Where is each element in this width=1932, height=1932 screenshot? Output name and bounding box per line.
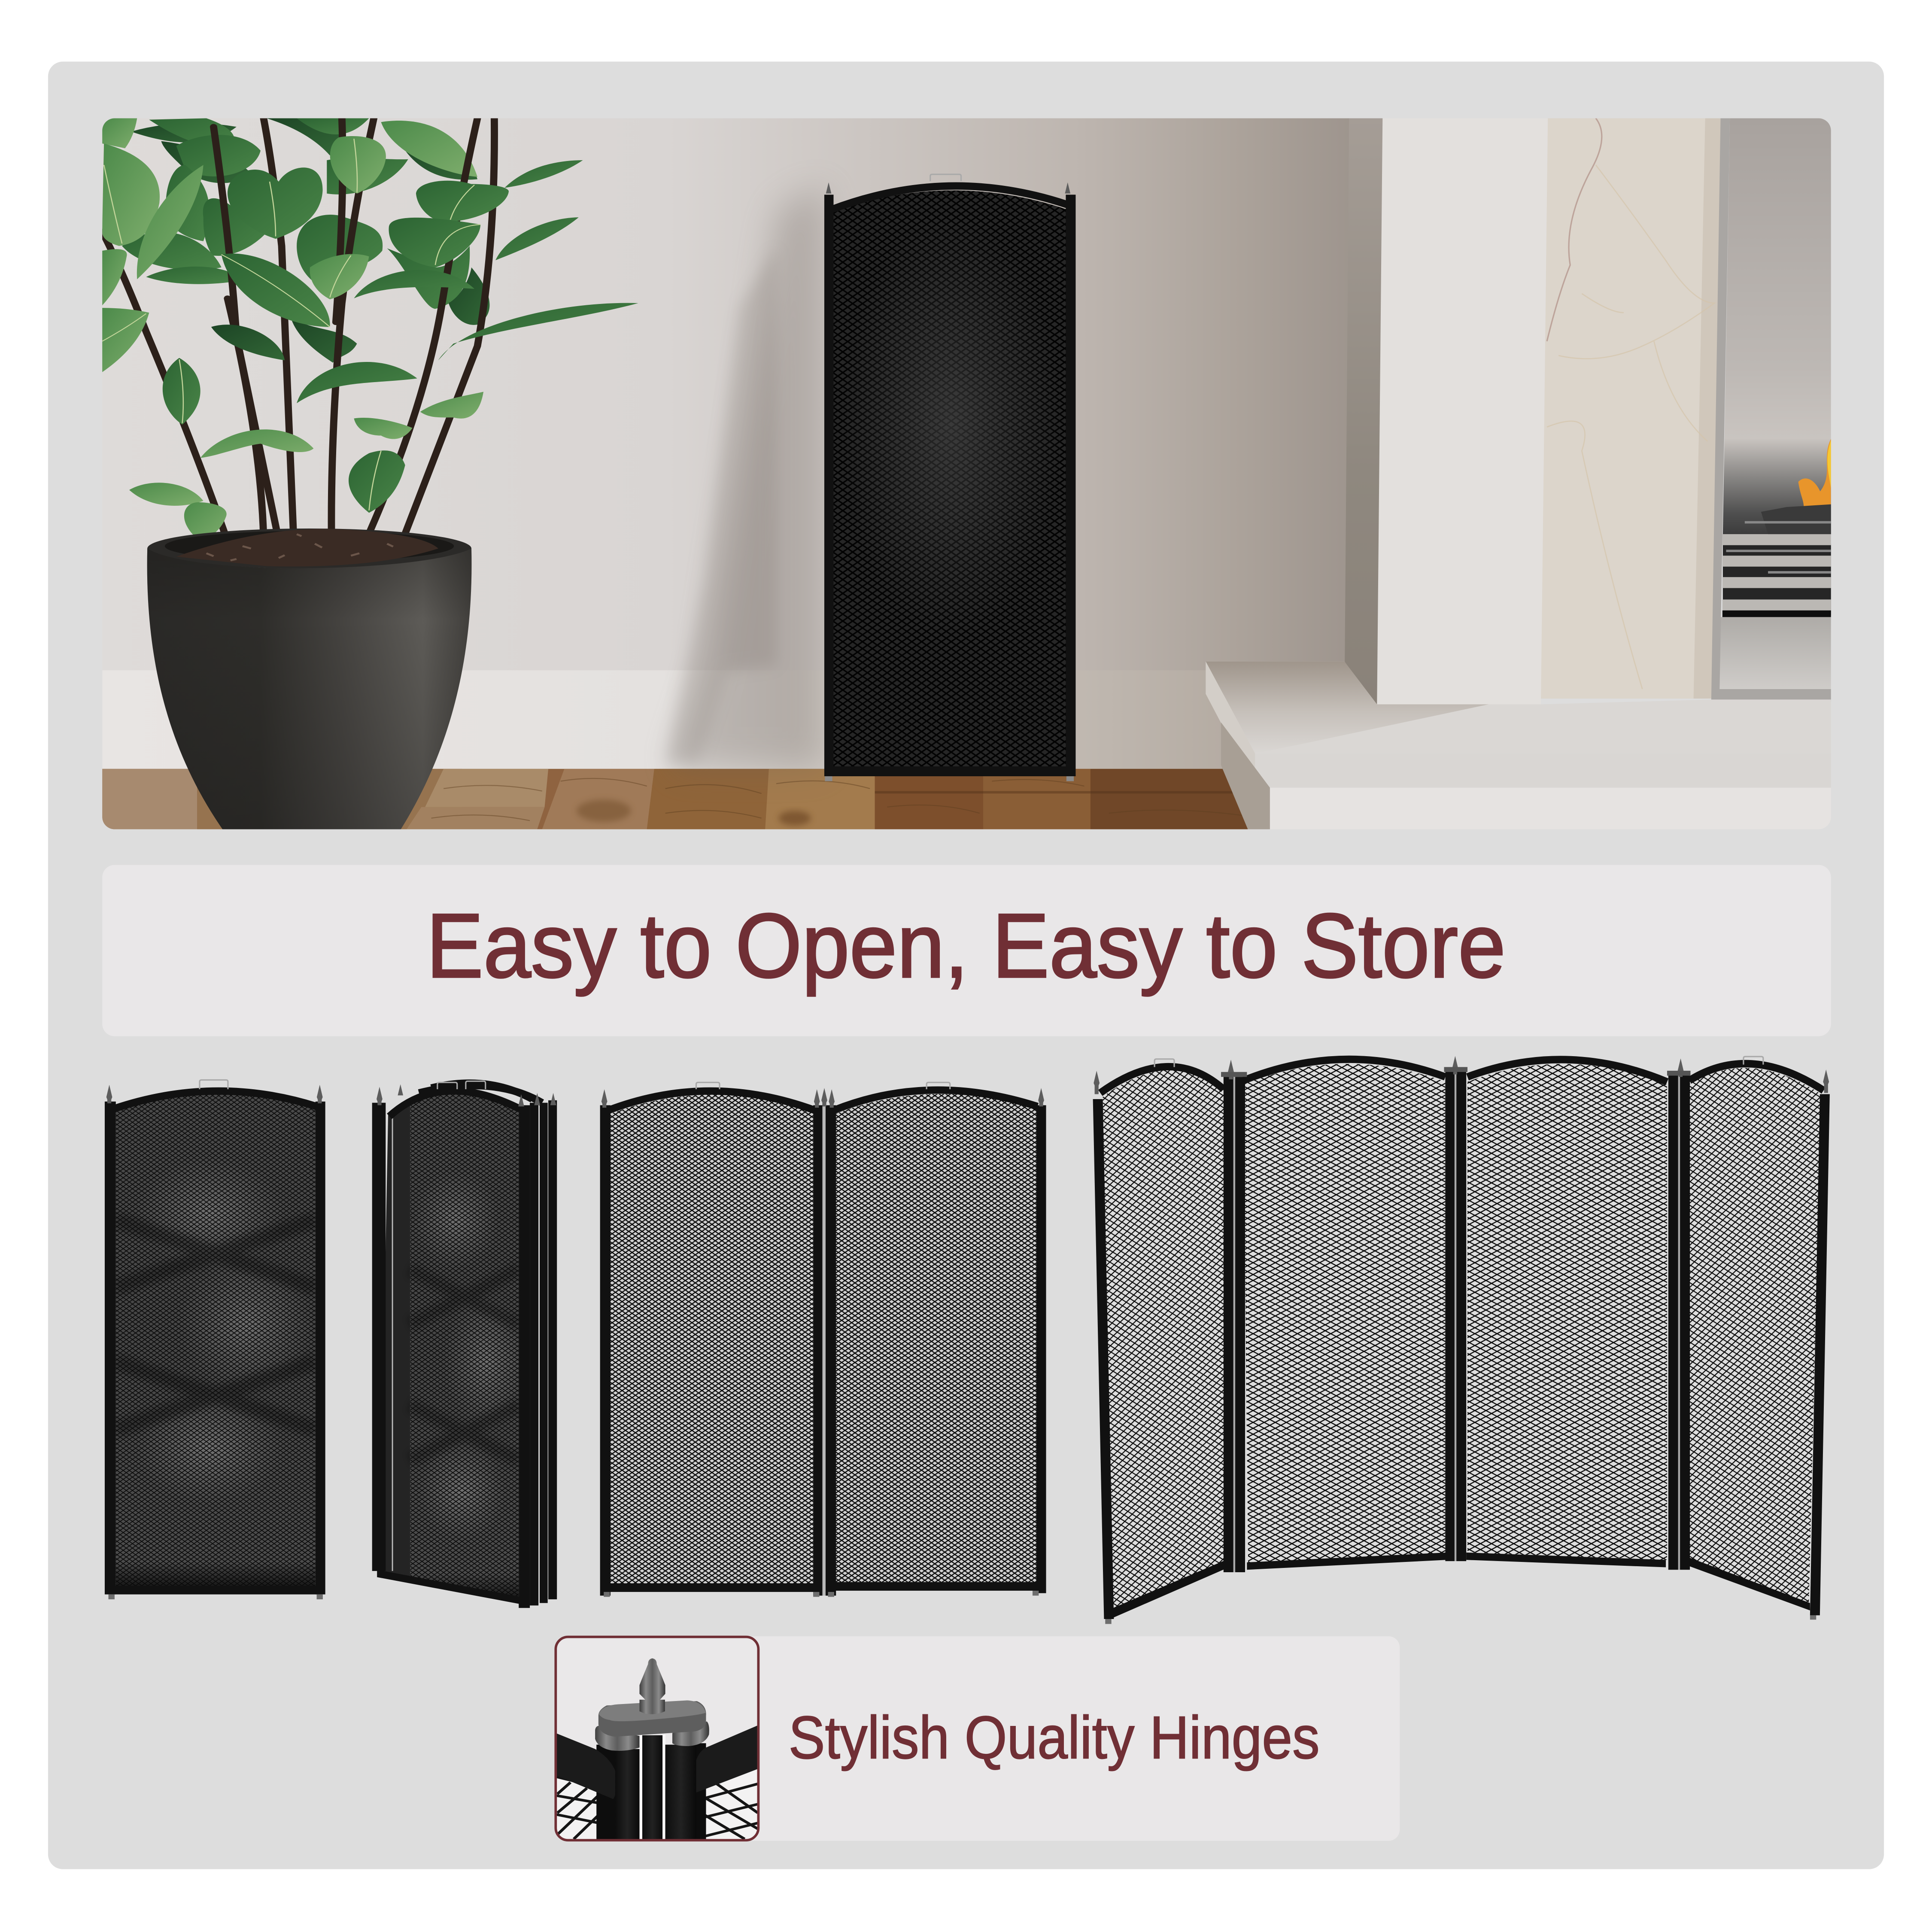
frame xyxy=(372,1081,556,1608)
wooden floor xyxy=(102,769,1261,829)
mesh left wires xyxy=(556,1777,613,1839)
mesh xyxy=(833,190,1067,768)
pillar side return xyxy=(1344,118,1384,704)
grate bars xyxy=(1722,534,1834,611)
moire glow xyxy=(116,1090,316,1587)
hearth base side xyxy=(1221,723,1270,832)
left tube xyxy=(615,1749,639,1841)
hearth side edge xyxy=(1206,662,1255,788)
coals xyxy=(1761,504,1833,534)
wall shadow of screen xyxy=(671,185,824,769)
right arm xyxy=(694,1725,759,1792)
pot rim xyxy=(147,529,471,568)
mesh right xyxy=(705,1768,758,1841)
finial xyxy=(639,1658,665,1714)
folded screen in room xyxy=(824,174,1075,781)
cap front xyxy=(598,1701,706,1737)
frame xyxy=(600,1082,1046,1597)
lifestyle photo: folded screen beside plant and fireplace xyxy=(102,118,1835,832)
hinge close-up thumbnail xyxy=(556,1636,759,1841)
title text: Easy to Open, Easy to Store xyxy=(426,895,1506,997)
panel 3 mesh xyxy=(1467,1064,1667,1560)
back rods xyxy=(419,1083,557,1605)
soil xyxy=(176,529,438,566)
title band xyxy=(102,865,1831,1036)
thumbnail border xyxy=(556,1637,758,1840)
right mesh xyxy=(835,1094,1037,1583)
back tubes xyxy=(596,1745,616,1841)
frame xyxy=(105,1080,325,1599)
hearth base front xyxy=(1270,788,1833,832)
left collar xyxy=(595,1726,639,1751)
fireplace xyxy=(1206,118,1835,832)
frames and hinges xyxy=(1093,1056,1830,1624)
flame xyxy=(1798,439,1832,513)
panel 4 mesh xyxy=(1684,1068,1821,1605)
centre tube xyxy=(642,1735,662,1841)
panel 2 mesh xyxy=(1243,1064,1445,1564)
back leaves xyxy=(122,118,489,363)
screen stage 1: fully folded xyxy=(105,1080,325,1599)
right tube xyxy=(665,1745,696,1841)
hearth front edge xyxy=(1255,753,1833,788)
pot shading xyxy=(147,549,471,832)
white gaps xyxy=(639,1735,665,1841)
mesh highlight xyxy=(840,216,1062,635)
screen stage 4: fully open four panels xyxy=(1093,1056,1830,1624)
hearth top xyxy=(1206,662,1833,753)
wall xyxy=(481,118,1349,671)
panel 1 mesh xyxy=(1103,1070,1228,1613)
mesh xyxy=(116,1090,316,1587)
mesh left xyxy=(556,1777,597,1841)
screen stage 2: partly folded xyxy=(372,1081,557,1608)
pillar front xyxy=(1377,118,1548,704)
moire xyxy=(410,1090,530,1599)
steel surround xyxy=(1711,118,1833,702)
frame xyxy=(824,174,1075,781)
hearth top shadow xyxy=(1206,662,1489,753)
skirting board xyxy=(102,670,1224,770)
pot body xyxy=(147,549,471,832)
fire opening xyxy=(1719,118,1835,689)
mesh right wires xyxy=(699,1784,758,1839)
front leaves xyxy=(102,118,638,541)
stems xyxy=(102,118,495,552)
hinge callout band xyxy=(556,1636,1400,1841)
mesh front xyxy=(410,1090,519,1599)
screen stage 3: two panels open xyxy=(600,1082,1046,1597)
cap top xyxy=(599,1701,706,1721)
left mesh xyxy=(610,1095,813,1585)
potted rubber plant xyxy=(102,118,638,832)
soft shadow band xyxy=(665,246,776,764)
mesh back strip xyxy=(380,1103,410,1580)
right collar xyxy=(672,1722,709,1746)
left arm xyxy=(556,1733,618,1799)
pot inner xyxy=(165,531,454,562)
marble slip xyxy=(1541,118,1722,699)
hinge callout text: Stylish Quality Hinges xyxy=(789,1704,1320,1771)
